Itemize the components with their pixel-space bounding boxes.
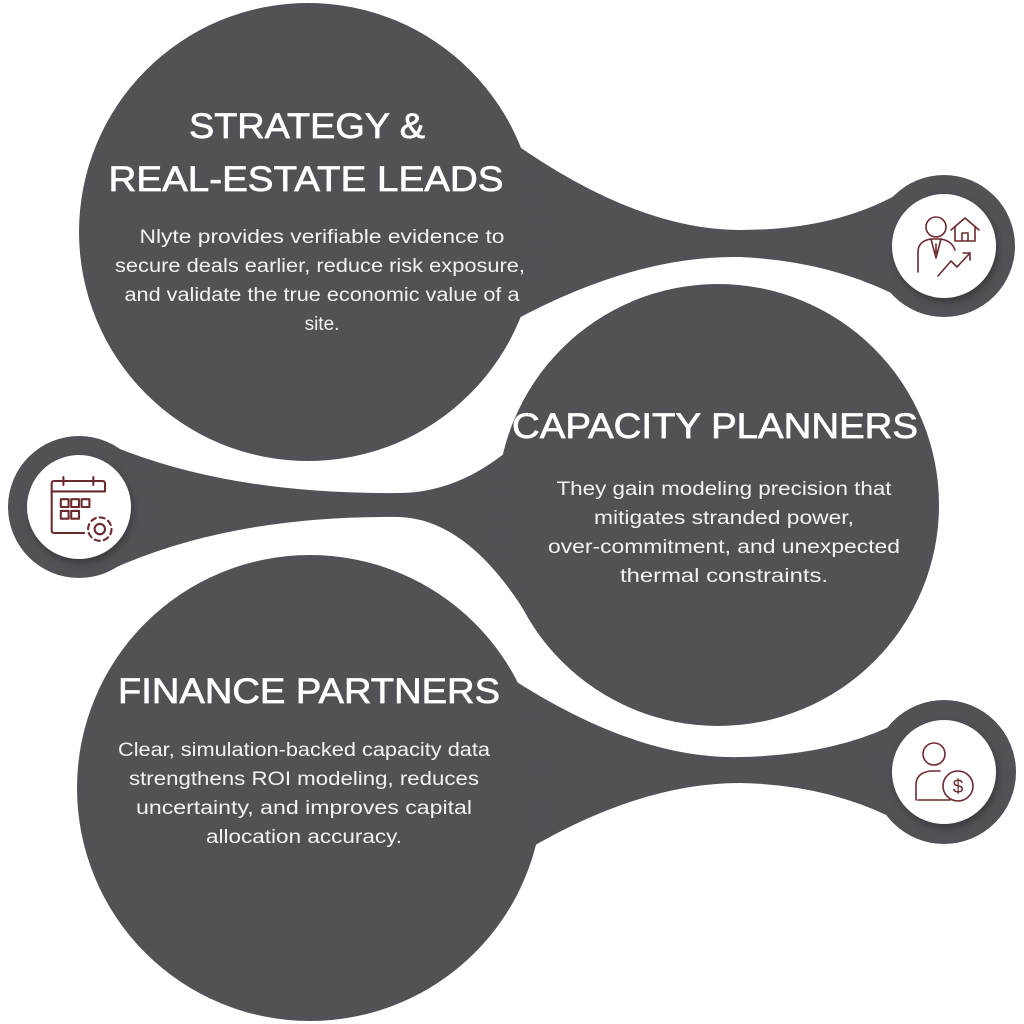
text: strategy body: site. [305,314,339,335]
heading: strategy: STRATEGY & [189,107,425,146]
text: capacity body: thermal constraints. [620,566,828,587]
text: capacity body: They gain modeling precision that [556,479,892,500]
panel: strategy & real-estate leads [79,3,1015,461]
icon: person with dollar coin: $ [953,777,964,798]
icon: person with house and chart [892,194,996,298]
text: strategy body: Nlyte provides verifiable evidence to [140,227,504,248]
text: strategy body [115,227,525,335]
text: capacity body [548,479,900,587]
text: finance body: strengthens ROI modeling, reduces [129,769,479,790]
heading: capacity planners: CAPACITY PLANNERS [512,407,918,446]
text: strategy body: secure deals earlier, reduce risk exposure, [115,256,525,277]
icon: calendar with gear [27,455,131,559]
heading: strategy [108,107,504,199]
text: finance body: Clear, simulation-backed capacity data [118,740,490,761]
icon: person with dollar coin [892,720,996,824]
heading: finance partners: FINANCE PARTNERS [118,672,500,711]
text: capacity body: mitigates stranded power, [594,508,854,529]
heading: strategy: REAL-ESTATE LEADS [108,160,504,199]
text: finance body: uncertainty, and improves capital [136,798,472,819]
panel: finance partners [77,555,1016,1021]
text: finance body: allocation accuracy. [206,827,402,848]
text: finance body [118,740,490,848]
text: capacity body: over-commitment, and unexpected [548,537,900,558]
text: strategy body: and validate the true economic value of a [124,285,520,306]
panel: capacity planners [8,284,939,726]
